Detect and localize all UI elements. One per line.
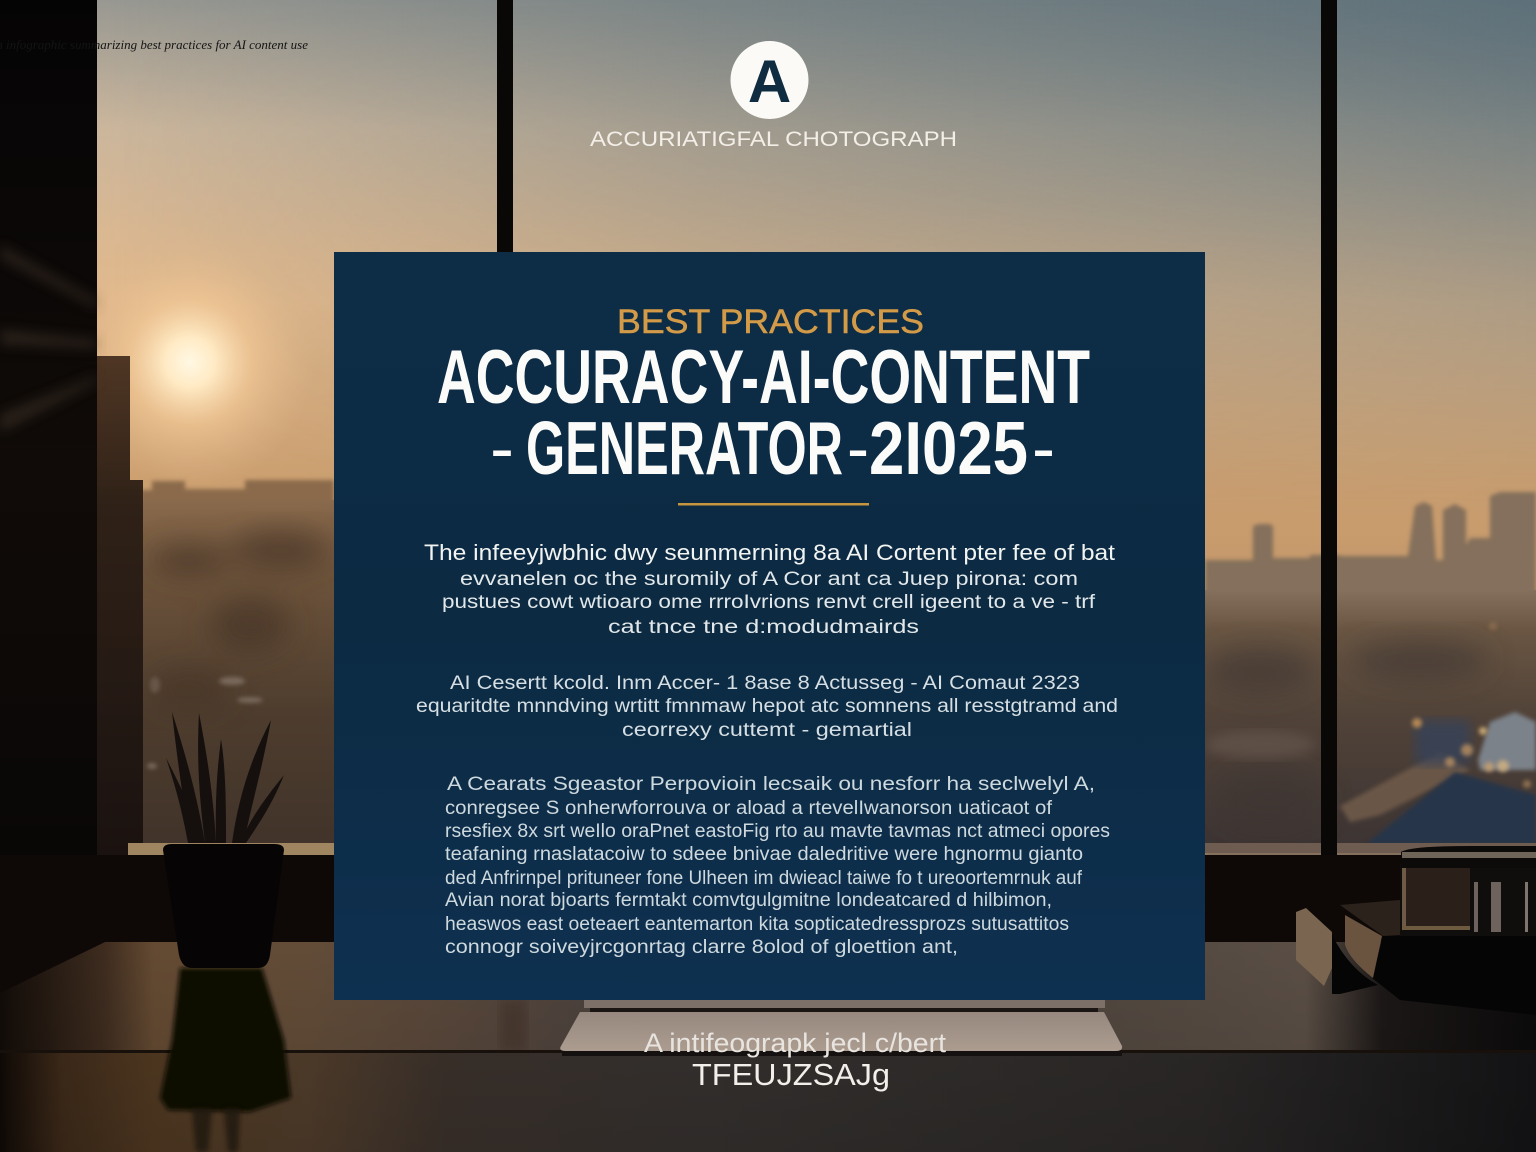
paragraph two: equaritdte mnndving wrtitt fmnmaw hepot atc somnens all resstgtramd and bbox=[416, 696, 1118, 717]
window mullion left bbox=[497, 0, 513, 260]
paragraph three: rsesfiex 8x srt weIlo oraPnet eastoFig rto au mavte tavmas nct atmeci opores bbox=[445, 821, 1110, 842]
footer caption on stand: TFEUJZSAJg bbox=[692, 1057, 890, 1092]
paragraph three: conregsee S onherwforrouva or aload a rtevelIwanorson uaticaot of bbox=[445, 798, 1053, 819]
paragraph two: AI Cesertt kcold. Inm Accer- 1 8ase 8 Actusseg - AI Comaut 2323 bbox=[450, 673, 1080, 694]
paragraph one: pustues cowt wtioaro ome rrroIvrions renvt crell igeent to a ve - trf bbox=[442, 592, 1096, 613]
paragraph three: connogr soiveyjrcgonrtag clarre 8olod of gloettion ant, bbox=[445, 937, 958, 958]
paragraph one: cat tnce tne d:modudmairds bbox=[608, 617, 919, 638]
gold divider bbox=[678, 503, 869, 506]
paragraph one bbox=[424, 540, 1115, 638]
paragraph three: Avian norat bjoarts fermtakt comvtgulgmitne londeatcared d hilbimon, bbox=[445, 890, 1052, 911]
main title: ACCURACY-AI-CONTENT bbox=[437, 335, 1090, 420]
plant shadow on desk bbox=[160, 968, 291, 1152]
logo: white circle with letter A bbox=[730, 41, 808, 119]
neighbourhood: roofs, car and lights bbox=[1205, 622, 1536, 845]
sun glow bbox=[65, 237, 315, 487]
paragraph two bbox=[416, 673, 1118, 741]
main title: 2I025 bbox=[869, 406, 1028, 490]
paragraph three bbox=[445, 774, 1110, 958]
paragraph three: teafaning rnaslatacoiw to sdeee bnivae daledritive were hgnormu gianto bbox=[445, 844, 1083, 865]
central navy panel bbox=[334, 252, 1205, 1000]
city haze left bbox=[140, 480, 334, 860]
logo wordmark: ACCURIATIGFAL CHOTOGRAPH bbox=[590, 128, 957, 151]
paragraph three: heaswos east oeteaert eantemarton kita sopticatedressprozs sutusattitos bbox=[445, 914, 1069, 935]
footer caption on stand: A intifeograpk jecl c/bert bbox=[644, 1028, 947, 1058]
window mullion right bbox=[1321, 0, 1337, 860]
monitor stand bbox=[560, 998, 1122, 1056]
logo: white circle with letter A: A bbox=[748, 48, 791, 115]
background: sky through window bbox=[0, 0, 1536, 860]
desk surface bbox=[0, 942, 1536, 1152]
paragraph three: ded Anfrirnpel prituneer fone Ulheen im dwieacl taiwe fo t ureoortemrnuk auf bbox=[445, 868, 1083, 889]
main title: GENERATOR bbox=[526, 406, 843, 490]
paragraph one: evvanelen oc the suromily of A Cor ant ca Juep pirona: com bbox=[460, 569, 1078, 590]
left building silhouette bbox=[97, 356, 143, 860]
plant leaves bbox=[166, 712, 284, 843]
footer caption on stand bbox=[644, 1028, 947, 1092]
main title bbox=[437, 335, 1090, 490]
plant pot bbox=[163, 844, 284, 968]
main title: - bbox=[490, 409, 514, 487]
heading: best practices: BEST PRACTICES bbox=[617, 303, 924, 341]
paragraph three: A Cearats Sgeastor Perpovioin lecsaik ou nesforr ha seclwelyl A, bbox=[447, 774, 1095, 795]
paragraph two: ceorrexy cuttemt - gemartial bbox=[622, 720, 912, 741]
window sill bbox=[0, 843, 1536, 1000]
paragraph one: The infeeyjwbhic dwy seunmerning 8a AI Cortent pter fee of bat bbox=[424, 540, 1115, 565]
main title: - bbox=[1032, 409, 1055, 487]
main title: - bbox=[847, 409, 869, 487]
city skyline right bbox=[1205, 492, 1536, 860]
left dark wall with light rays bbox=[0, 0, 97, 950]
desk objects right bbox=[1296, 846, 1536, 1015]
